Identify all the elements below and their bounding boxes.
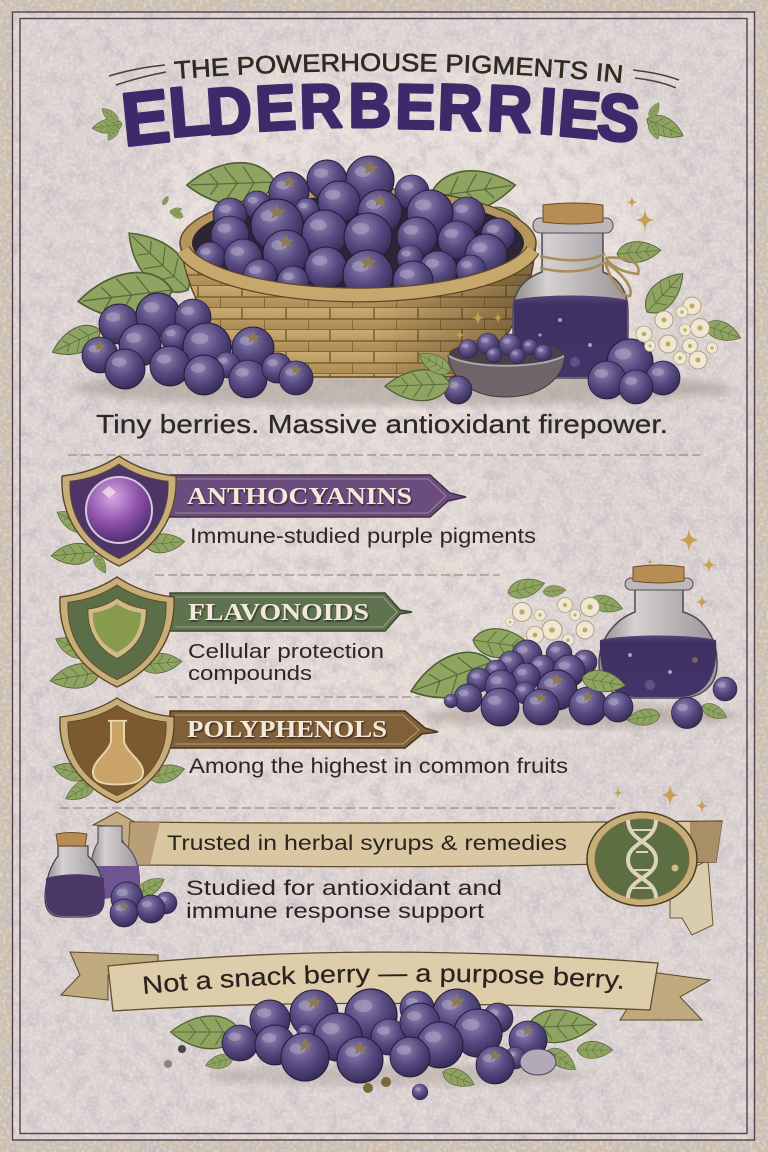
heading: ANTHOCYANINS xyxy=(187,484,412,510)
leaves behind basket xyxy=(47,162,744,364)
sparkles xyxy=(647,528,716,609)
title line two: E xyxy=(254,71,298,145)
closing banner xyxy=(60,952,712,1020)
title line two: D xyxy=(204,72,254,149)
description line two: immune response support xyxy=(186,900,484,923)
panel: polyphenols xyxy=(51,698,568,806)
title line one: THE POWERHOUSE PIGMENTS IN xyxy=(174,53,622,83)
description line one: Studied for antioxidant and xyxy=(186,877,502,900)
leaves behind shield xyxy=(48,631,183,693)
leaves xyxy=(171,1008,613,1092)
hero illustration: basket, jar and berries xyxy=(47,156,744,406)
icon: right leaf sprig xyxy=(643,101,687,144)
basket front xyxy=(180,243,536,377)
leaves at foot xyxy=(384,347,454,402)
title swooshes xyxy=(109,65,679,88)
title line two: E xyxy=(118,74,173,162)
icon: DNA medallion xyxy=(587,812,697,906)
icon: syrup bottles xyxy=(45,826,177,927)
title line two: E xyxy=(395,72,436,143)
panel: anthocyanins xyxy=(50,456,536,576)
title line two: R xyxy=(437,72,483,145)
berries in basket xyxy=(195,156,515,301)
basket back and interior xyxy=(180,188,536,298)
panel: flavonoids xyxy=(48,577,412,693)
icon: left leaf sprig xyxy=(91,105,123,143)
title line two: L xyxy=(166,71,213,152)
title line two: R xyxy=(299,70,343,141)
jar xyxy=(599,565,717,698)
title line two: I xyxy=(537,76,559,149)
icon: purple orb shield xyxy=(62,456,176,566)
description: Cellular protection xyxy=(188,641,384,663)
heading: FLAVONOIDS xyxy=(188,600,369,626)
small sprig xyxy=(161,195,184,220)
banner text: Not a snack berry — a purpose berry. xyxy=(144,965,622,994)
title line two: R xyxy=(486,73,534,147)
heading: POLYPHENOLS xyxy=(187,717,387,743)
parchment banner xyxy=(93,812,722,935)
berry cluster footer xyxy=(164,989,613,1100)
ribbon xyxy=(170,593,412,631)
banner text: Trusted in herbal syrups & remedies xyxy=(167,832,567,855)
description: Among the highest in common fruits xyxy=(189,755,568,778)
title xyxy=(92,53,684,162)
tagline: Tiny berries. Massive antioxidant firepower. xyxy=(96,409,668,439)
ribbon xyxy=(170,475,466,517)
leaves behind shield xyxy=(50,505,186,576)
title line two: E xyxy=(556,76,603,153)
icon: green protection shield xyxy=(60,577,174,687)
sparkles near section four xyxy=(613,784,708,813)
ribbon xyxy=(170,711,438,748)
berries pile left xyxy=(82,293,313,398)
gold sparkles xyxy=(455,196,655,340)
glass jar of syrup xyxy=(513,203,639,378)
ribbon tails and band xyxy=(61,952,710,1020)
elderflower cluster xyxy=(636,297,718,369)
title line two: B xyxy=(349,71,391,140)
soft ground shadow xyxy=(70,370,730,406)
leaves and berries beside jar xyxy=(580,668,737,728)
icon: flask shield xyxy=(60,698,174,802)
side illustration: jar, flowers and berries xyxy=(404,528,740,728)
description: Immune-studied purple pigments xyxy=(190,525,536,548)
berries right of jar xyxy=(588,339,680,404)
title line two: S xyxy=(594,79,643,157)
flowers xyxy=(506,598,600,646)
small bowl of berries xyxy=(444,333,565,404)
leaves behind shield xyxy=(51,759,187,806)
leaves xyxy=(404,574,625,711)
panel: herbal uses xyxy=(45,812,722,935)
berries xyxy=(164,989,556,1100)
berries xyxy=(444,640,633,726)
description second line: compounds xyxy=(188,663,312,685)
